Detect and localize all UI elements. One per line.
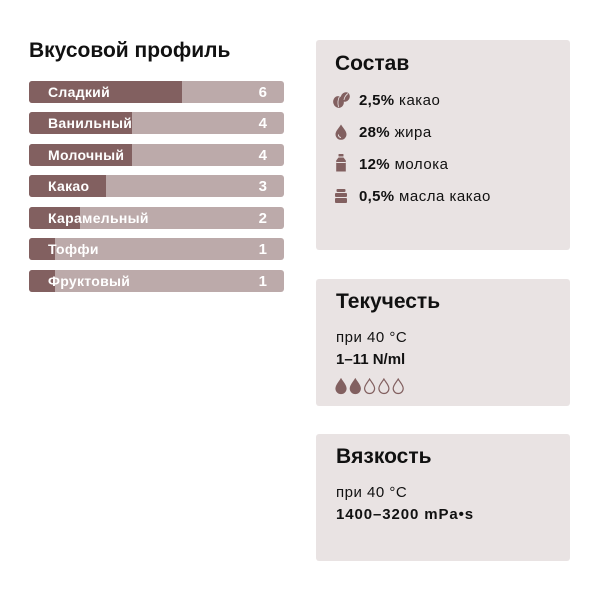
bar: vanilla: 4 xyxy=(259,115,267,132)
bar: caramel xyxy=(29,207,284,229)
bar: toffee: Тоффи xyxy=(48,241,99,257)
bar: milky: Молочный xyxy=(48,147,124,163)
icon: milk bottle xyxy=(336,154,346,172)
heading: flavour profile: Вкусовой профиль xyxy=(29,39,230,62)
bar: caramel: 2 xyxy=(259,210,267,227)
text: viscosity temperature: при 40 °С xyxy=(336,484,407,501)
bar: vanilla: Ванильный xyxy=(48,115,132,131)
icon: fat drop xyxy=(336,124,346,140)
panel: composition xyxy=(316,40,570,250)
heading: composition: Состав xyxy=(335,52,409,75)
bar: sweet: Сладкий xyxy=(48,84,110,100)
text: fluidity temperature: при 40 °С xyxy=(336,329,407,346)
icon: fluidity drops rating xyxy=(335,378,404,394)
icon: cocoa butter jar xyxy=(335,189,347,203)
text: viscosity value: 1400–3200 mPa•s xyxy=(336,506,474,523)
heading: fluidity: Текучесть xyxy=(336,290,440,313)
bar: milky: 4 xyxy=(259,147,267,164)
bar: caramel: Карамельный xyxy=(48,210,149,226)
text: fat share: 28% жира xyxy=(359,124,432,141)
text: cocoa butter share: 0,5% масла какао xyxy=(359,188,491,205)
bar: cocoa: Какао xyxy=(48,178,89,194)
bar: sweet xyxy=(29,81,284,103)
bar: vanilla xyxy=(29,112,284,134)
bar: milky xyxy=(29,144,284,166)
bar: fruity: Фруктовый xyxy=(48,273,130,289)
bar: fruity xyxy=(29,270,284,292)
bar: fruity: 1 xyxy=(259,273,267,290)
panel: viscosity xyxy=(316,434,570,561)
text: cocoa share: 2,5% какао xyxy=(359,92,440,109)
bar: toffee xyxy=(29,238,284,260)
bar: sweet: 6 xyxy=(259,84,267,101)
icon: cocoa beans xyxy=(333,92,350,108)
bar: toffee: 1 xyxy=(259,241,267,258)
heading: viscosity: Вязкость xyxy=(336,445,432,468)
bar: cocoa: 3 xyxy=(259,178,267,195)
bar: cocoa xyxy=(29,175,284,197)
panel: fluidity xyxy=(316,279,570,406)
text: fluidity value: 1–11 N/ml xyxy=(336,351,405,368)
text: milk share: 12% молока xyxy=(359,156,448,173)
